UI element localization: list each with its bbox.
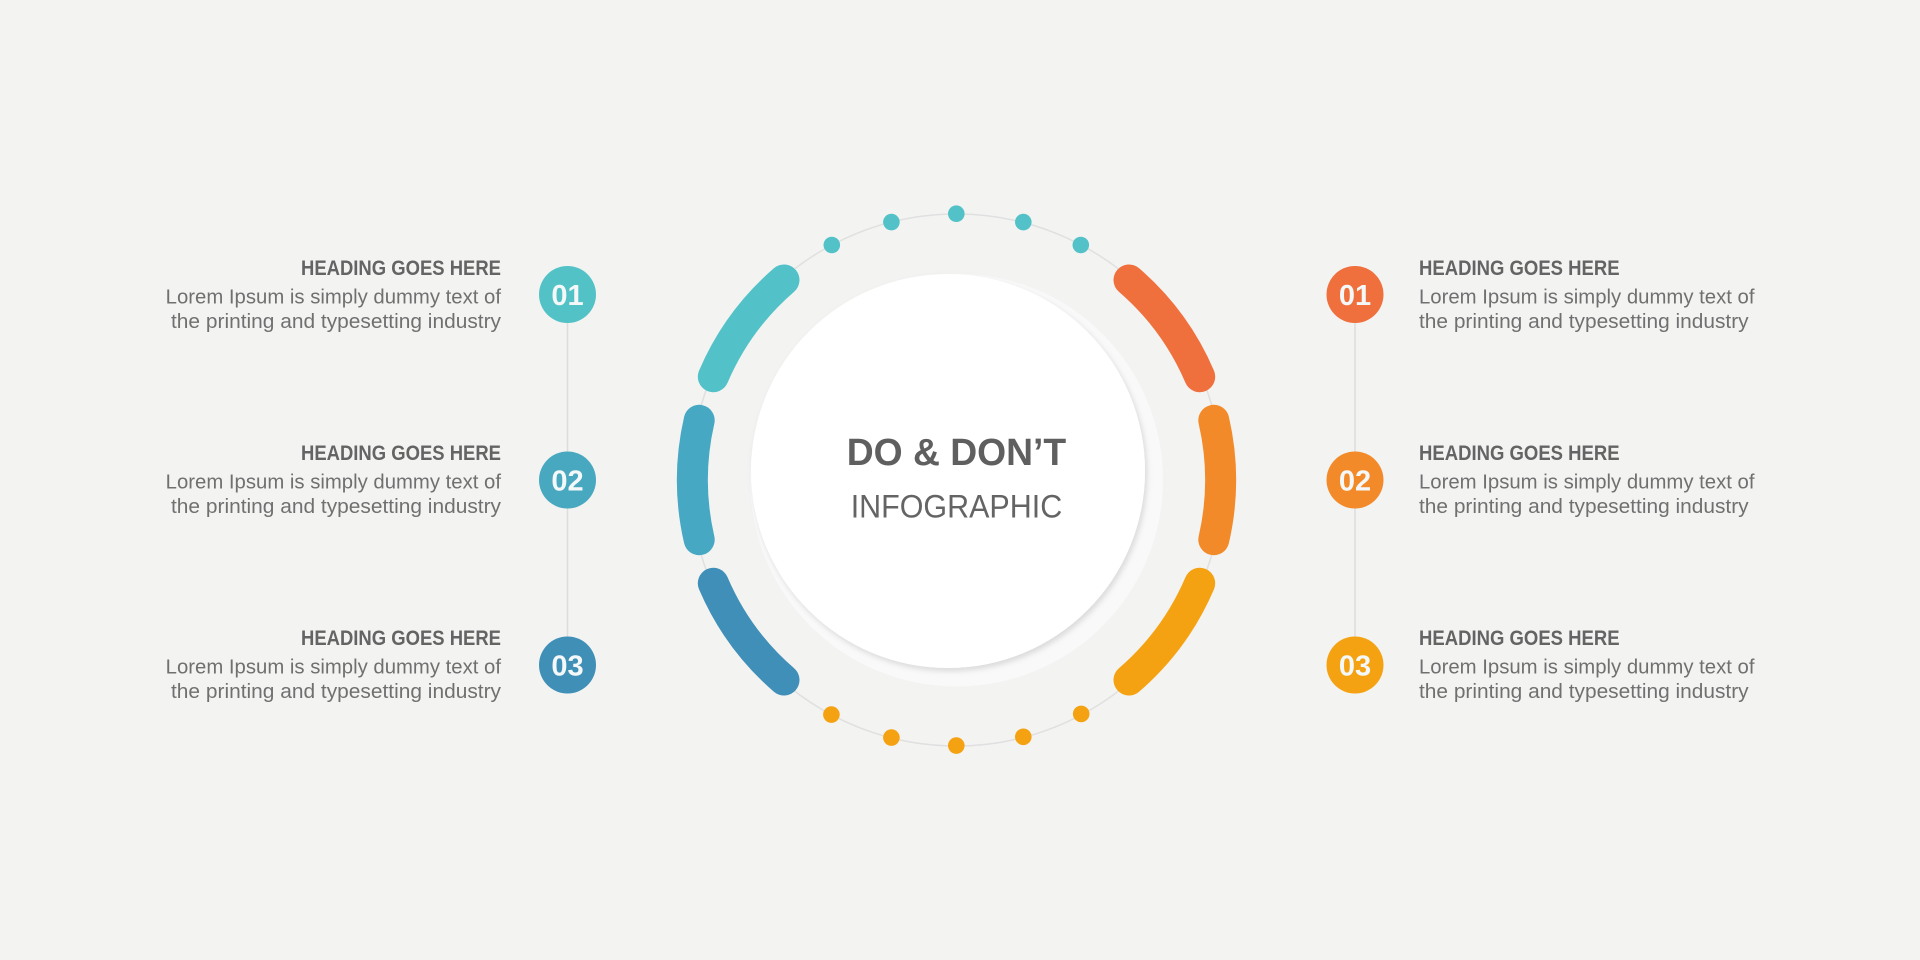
arc: amber bottom right bbox=[1129, 583, 1200, 680]
right item 01: 01 bbox=[1339, 280, 1371, 312]
left item 02: the printing and typesetting industry bbox=[171, 496, 501, 518]
right item 02: Lorem Ipsum is simply dummy text of bbox=[1419, 472, 1755, 494]
right item 03: Lorem Ipsum is simply dummy text of bbox=[1419, 656, 1755, 678]
right item 03: 03 bbox=[1339, 650, 1371, 682]
arc: teal top left bbox=[713, 280, 784, 377]
left item 03 bbox=[166, 627, 596, 703]
right item 03: HEADING GOES HERE bbox=[1419, 627, 1620, 650]
right item 02: HEADING GOES HERE bbox=[1419, 442, 1620, 465]
title bbox=[847, 432, 1066, 524]
right item 02: the printing and typesetting industry bbox=[1419, 496, 1749, 518]
top teal dots bbox=[824, 205, 1089, 253]
right item 01: Lorem Ipsum is simply dummy text of bbox=[1419, 286, 1755, 308]
arc: orange middle right bbox=[1214, 420, 1221, 540]
left item 02: Lorem Ipsum is simply dummy text of bbox=[166, 472, 501, 494]
right item 03 bbox=[1326, 627, 1755, 703]
right item 02: 02 bbox=[1339, 466, 1371, 498]
left item 01: HEADING GOES HERE bbox=[301, 257, 501, 280]
left item 01: 01 bbox=[551, 280, 584, 312]
left item 01 bbox=[166, 257, 596, 333]
left item 02: 02 bbox=[551, 466, 584, 498]
left item 03: 03 bbox=[551, 650, 584, 682]
arc: red orange top right bbox=[1129, 280, 1200, 377]
right item 01 bbox=[1326, 257, 1755, 333]
center ring diagram bbox=[690, 205, 1222, 754]
right item 02 bbox=[1326, 442, 1755, 518]
center disc bbox=[750, 274, 1163, 686]
left item 03: HEADING GOES HERE bbox=[301, 627, 501, 650]
left item 03: Lorem Ipsum is simply dummy text of bbox=[166, 656, 501, 678]
right item 01: HEADING GOES HERE bbox=[1419, 257, 1620, 280]
title: INFOGRAPHIC bbox=[851, 488, 1062, 524]
arc: blue bottom left bbox=[713, 583, 784, 680]
bottom amber dots bbox=[823, 706, 1089, 754]
arc: cyan blue middle left bbox=[692, 420, 699, 540]
right column: don't items bbox=[1326, 257, 1755, 703]
left column: do items bbox=[166, 257, 596, 703]
left item 03: the printing and typesetting industry bbox=[171, 681, 501, 703]
left item 02 bbox=[166, 442, 596, 518]
left item 01: the printing and typesetting industry bbox=[171, 311, 501, 333]
right item 03: the printing and typesetting industry bbox=[1419, 681, 1749, 703]
title: DO & DON’T bbox=[847, 432, 1066, 474]
right item 01: the printing and typesetting industry bbox=[1419, 311, 1749, 333]
left item 02: HEADING GOES HERE bbox=[301, 442, 501, 465]
left item 01: Lorem Ipsum is simply dummy text of bbox=[166, 286, 501, 308]
